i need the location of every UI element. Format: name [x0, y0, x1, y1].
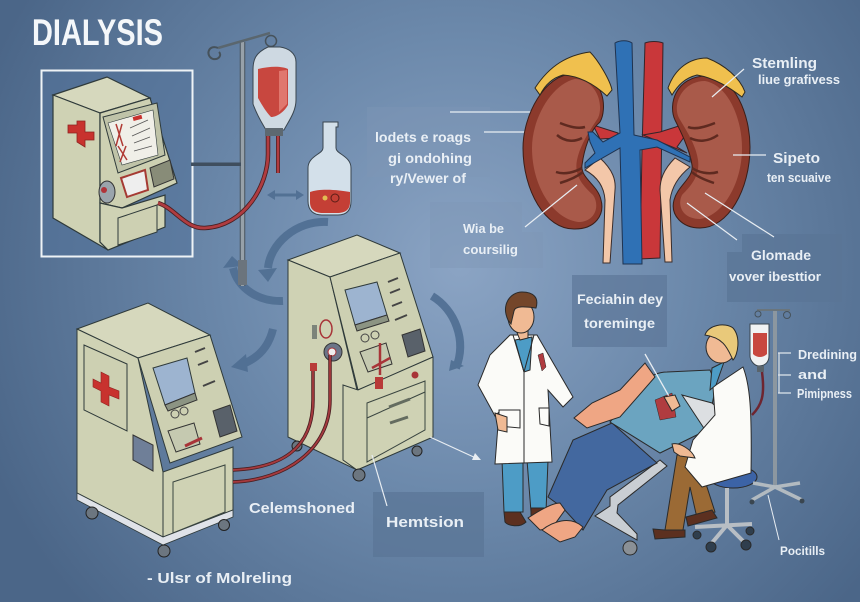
red cross [68, 121, 94, 147]
patient in chair [528, 354, 716, 555]
label block: top centre: gi ondohing [388, 150, 472, 166]
feet [528, 503, 565, 530]
label: Glomade: vover ibesttior [729, 269, 821, 284]
chair [595, 460, 667, 540]
bottle [308, 122, 351, 215]
doctor standing [478, 292, 573, 526]
machine: right [288, 235, 433, 481]
shirt [610, 370, 716, 453]
aorta [640, 42, 663, 259]
label block: top centre [367, 107, 566, 186]
label: Glomade: Glomade [751, 247, 811, 263]
label block: top centre: ry/Vewer of [390, 170, 466, 186]
label: Glomade [687, 193, 842, 302]
jeans [548, 423, 657, 530]
doctor seated [653, 325, 757, 552]
arm [574, 363, 655, 428]
label: Feciahin dey: Feciahin dey [577, 291, 663, 307]
machine: left [77, 303, 242, 557]
label: Hemtsion [372, 437, 484, 557]
label: Sipeto: ten scuaive [767, 171, 831, 185]
iv stand with blood bag [158, 33, 296, 286]
screen [153, 358, 195, 405]
label: Sipeto [733, 150, 831, 185]
connecting tubes [233, 355, 330, 482]
label: Sipeto: Sipeto [773, 150, 820, 167]
renal arteries [593, 125, 687, 153]
right kidney [673, 76, 750, 228]
label: Stemling [712, 55, 840, 97]
legs [665, 450, 715, 530]
label: Feciahin dey [572, 275, 667, 347]
label: Dredining and Pimipness [778, 347, 857, 401]
label: Wia be coursilig: coursilig [463, 242, 518, 257]
left kidney [523, 74, 603, 229]
label: Pocitills: Pocitills [780, 544, 825, 558]
label: Dredining and Pimipness: and [798, 367, 827, 382]
coat [685, 367, 751, 487]
label block: top centre: lodets e roags [375, 129, 471, 145]
screen [345, 282, 387, 325]
vena cava [585, 41, 690, 264]
title: DIALYSIS [32, 12, 163, 53]
label: Stemling: liue grafivess [758, 72, 840, 87]
iv stand right [750, 310, 804, 540]
sleeve [682, 395, 745, 445]
stool [709, 466, 757, 488]
kidney anatomy [523, 41, 750, 264]
curved flow arrows [223, 190, 464, 372]
side panel and red cross [84, 345, 127, 431]
label: Dredining and Pimipness: Pimipness [797, 387, 852, 401]
adrenal glands [535, 52, 612, 96]
label: Feciahin dey: toreminge [584, 315, 655, 331]
ureters [585, 158, 690, 263]
label: Stemling: Stemling [752, 55, 817, 72]
label: Hemtsion: Hemtsion [386, 514, 464, 531]
label: Celemshoned: Celemshoned [249, 500, 355, 517]
screen [103, 103, 165, 173]
label: Wia be coursilig: Wia be [463, 221, 504, 236]
label: Wia be coursilig [430, 185, 577, 268]
label: Ulsr of Molreling: - Ulsr of Molreling [147, 570, 292, 587]
label: Dredining and Pimipness: Dredining [798, 347, 857, 362]
framed dialysis machine [42, 70, 192, 256]
